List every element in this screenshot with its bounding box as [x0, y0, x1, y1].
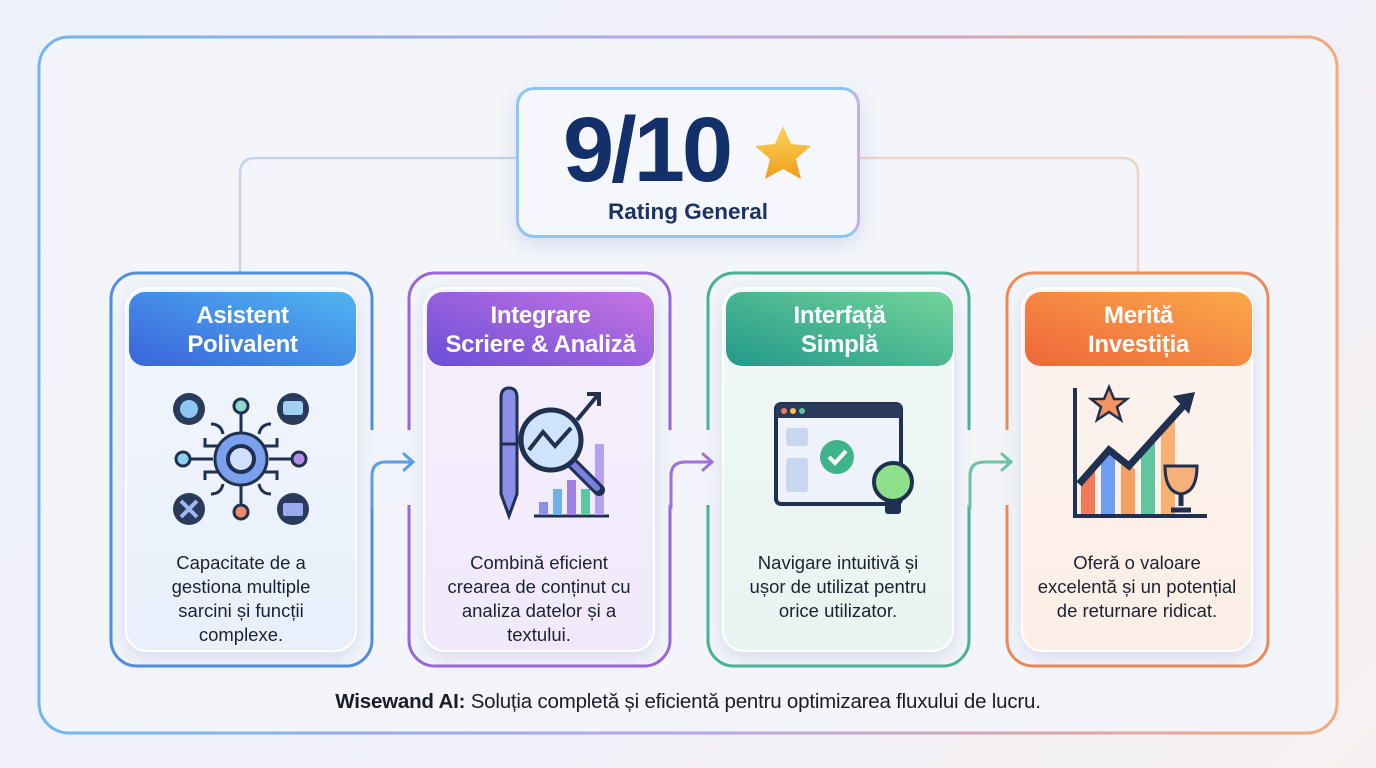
icon: gear network — [173, 393, 309, 525]
description — [172, 552, 310, 645]
description: excelentă și un potențial — [1038, 576, 1236, 597]
icon: browser with check and bulb — [774, 402, 914, 514]
description — [1038, 552, 1236, 621]
arrow: card1 to card2 — [370, 452, 416, 510]
icon: pen and magnifier chart — [500, 386, 609, 520]
header: Merită — [1104, 302, 1173, 329]
description: sarcini și funcții — [178, 600, 304, 621]
description: analiza datelor și a — [462, 600, 616, 621]
panel: Integrare Scriere & Analiză — [423, 287, 655, 652]
description: crearea de conținut cu — [447, 576, 631, 597]
footer tagline: Wisewand AI: Soluția completă și eficientă pentru optimizarea fluxului de lucru. — [335, 690, 1041, 713]
description: Oferă o valoare — [1073, 552, 1201, 573]
arrow: card3 to card4 — [968, 452, 1014, 510]
header: Investiția — [1088, 331, 1189, 358]
panel: Interfață Simplă — [722, 287, 954, 652]
header: Simplă — [801, 331, 878, 358]
description — [447, 552, 631, 645]
header — [129, 292, 356, 366]
header: Integrare — [490, 302, 590, 329]
header — [726, 292, 953, 366]
header: Interfață — [794, 302, 886, 329]
panel: Asistent Polivalent — [125, 287, 357, 652]
description: orice utilizator. — [779, 600, 897, 621]
description — [750, 552, 926, 621]
panel: Merită Investiția — [1021, 287, 1253, 652]
description: Combină eficient — [470, 552, 608, 573]
description: textului. — [507, 624, 571, 645]
description: ușor de utilizat pentru — [750, 576, 926, 597]
header: Polivalent — [187, 331, 298, 358]
header — [1025, 292, 1252, 366]
header: Asistent — [196, 302, 289, 329]
icon: growth chart with trophy — [1073, 384, 1207, 518]
arrow: card2 to card3 — [670, 452, 714, 510]
rating box — [516, 87, 860, 238]
score: 9/10 — [563, 99, 730, 201]
header: Scriere & Analiză — [445, 331, 636, 358]
description: de returnare ridicat. — [1057, 600, 1217, 621]
description: complexe. — [199, 624, 283, 645]
description: Navigare intuitivă și — [758, 552, 918, 573]
description: gestiona multiple — [172, 576, 310, 597]
icon: star — [755, 126, 811, 179]
header — [427, 292, 654, 366]
description: Capacitate de a — [176, 552, 306, 573]
label: Rating General — [608, 199, 768, 224]
